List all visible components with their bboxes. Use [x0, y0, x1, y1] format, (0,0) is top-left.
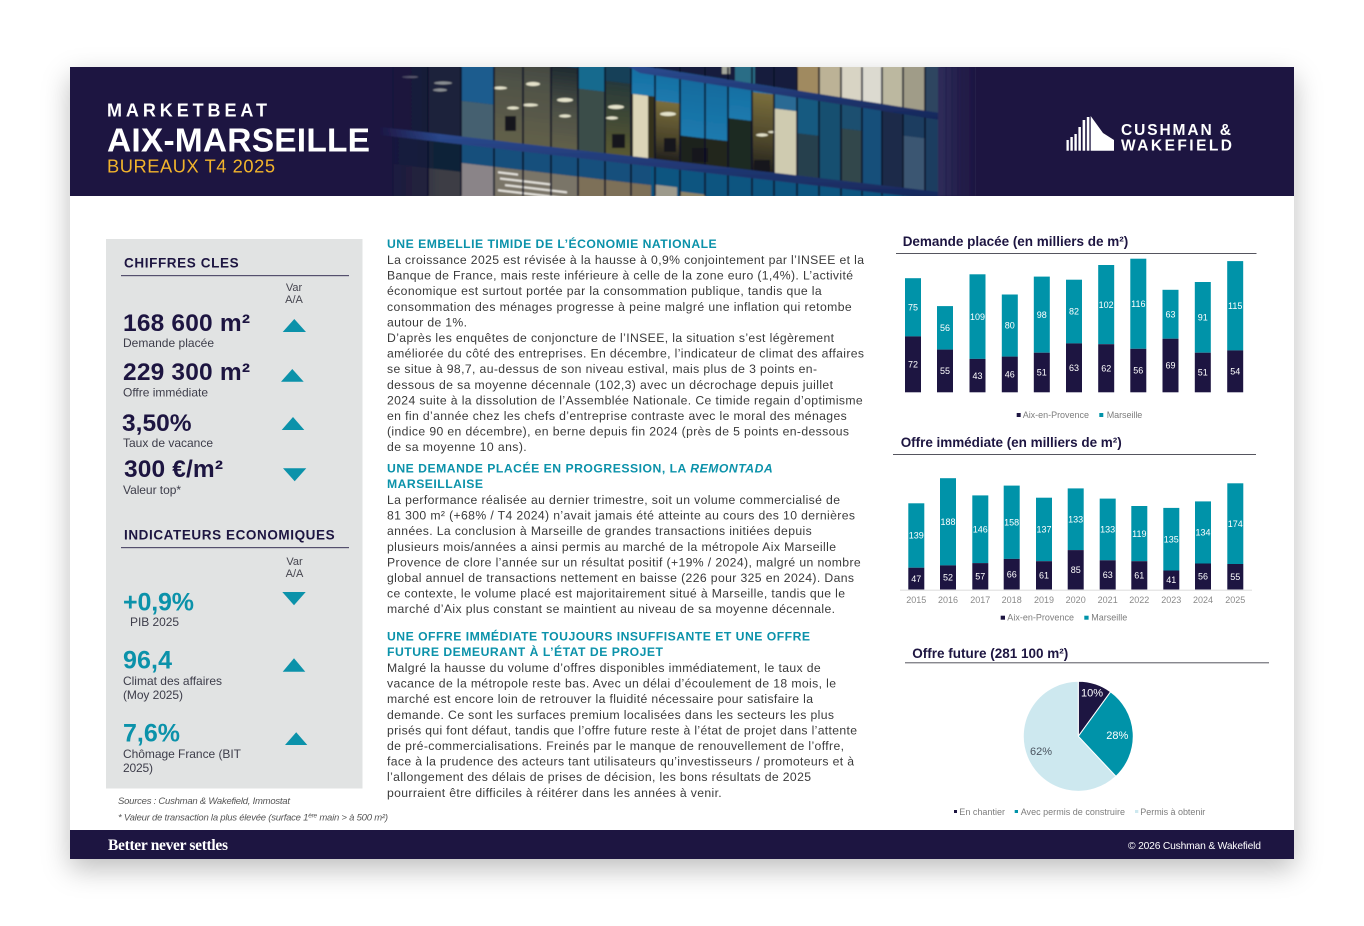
year axis: 2023	[1161, 595, 1181, 605]
text block: offre immediate: marché est encore loin de retrouver la fluidité nécessaire pour satisfaire la	[387, 692, 813, 706]
data labels: 119	[1132, 529, 1146, 539]
chart title: Offre future (281 100 m²)	[912, 646, 1068, 661]
data labels: 56	[940, 323, 950, 333]
stacked bars: Marseille	[908, 478, 1243, 570]
chart title: Demande placée (en milliers de m²)	[903, 234, 1128, 249]
text block: economie nationale: consommation des ménages progresse à peine malgré une inflation qui retombe	[387, 300, 852, 314]
office chairs	[505, 116, 770, 172]
tagline: Better never settles	[108, 837, 228, 854]
indicator: PIB: PIB 2025	[130, 615, 179, 629]
title block	[107, 101, 370, 177]
year axis: 2017	[970, 595, 990, 605]
text block: economie nationale: dessous de sa moyenne décennale (102,3) avec un décrochage depuis juillet	[387, 378, 834, 392]
kpi: taux de vacance	[122, 410, 304, 450]
year axis: 2018	[1002, 595, 1022, 605]
text block: demande placee	[387, 460, 861, 616]
data labels: 47	[911, 574, 921, 584]
column label: variation	[286, 556, 304, 580]
legend: Marseille	[1091, 613, 1127, 623]
data labels: 135	[1164, 534, 1179, 544]
text block: offre immediate: prisés qui font défaut, tandis que l’offre future reste à l’état de projet dans l’attente	[387, 723, 857, 737]
year axis: 2019	[1034, 595, 1054, 605]
text block: economie nationale	[387, 236, 864, 454]
legend: Marseille	[1107, 410, 1142, 420]
data labels: 72	[908, 360, 918, 370]
pie labels: 28%	[1106, 730, 1129, 742]
stacked bars: Marseille	[905, 259, 1243, 359]
indicator: PIB: +0,9%	[123, 589, 194, 617]
data labels: 43	[972, 371, 983, 381]
legend: En chantier	[959, 807, 1005, 817]
pie slices	[1023, 681, 1133, 791]
year axis	[906, 595, 1245, 605]
data labels: 134	[1195, 528, 1211, 538]
text block: offre immediate: pourraient être difficiles à réitérer dans les années à venir.	[387, 786, 722, 800]
data labels: 115	[1228, 301, 1242, 311]
text block: offre immediate: UNE OFFRE IMMÉDIATE TOUJOURS INSUFFISANTE ET UNE OFFRE	[387, 628, 810, 643]
data labels: 63	[1165, 309, 1176, 319]
column label: variation: Var	[286, 282, 302, 294]
text block: economie nationale: (indice 90 en décembre), en berne depuis fin 2024 (près de 5 points en-dessous	[387, 425, 849, 439]
indicator: chomage	[123, 720, 307, 775]
data labels: 55	[1230, 572, 1240, 582]
data labels: 41	[1166, 575, 1176, 585]
text block: economie nationale: UNE EMBELLIE TIMIDE DE L’ÉCONOMIE NATIONALE	[387, 236, 717, 251]
chart: demande placee	[896, 234, 1256, 420]
panel: key figures and indicators	[106, 239, 362, 788]
stacked bars: Aix-en-Provence	[905, 336, 1243, 392]
top floor	[644, 67, 940, 113]
kpi: valeur top	[123, 456, 306, 497]
indicator: climat des affaires: Climat des affaires	[123, 674, 222, 688]
text block: economie nationale: Banque de France, mais reste inférieure à celle de la zone euro (1,4%). L’activité	[387, 269, 853, 283]
title block: BUREAUX T4 2025	[107, 156, 275, 177]
chart: offre future pie	[905, 646, 1269, 817]
kpi: valeur top: 300 €/m²	[124, 456, 223, 483]
legend: Permis à obtenir	[1140, 807, 1205, 817]
text block: economie nationale: économique est surtout portée par la consommation publique, tandis que la	[387, 284, 822, 298]
text block: economie nationale: en fin d’année chez les chefs d’entreprise contraste avec le moral des ménages	[387, 409, 847, 423]
text block: offre immediate: l’allongement des délais de prises de décision, les bons résultats de 2025	[387, 770, 811, 784]
column label: variation	[285, 282, 304, 306]
text block: offre immediate: FUTURE DEMEURANT À L’ÉTAT DE PROJET	[387, 644, 664, 659]
chart title: Offre immédiate (en milliers de m²)	[901, 435, 1122, 450]
data labels: 54	[1230, 366, 1240, 376]
data labels: 75	[908, 302, 918, 312]
data labels: 63	[1069, 363, 1079, 373]
photo: office building facade at dusk	[386, 67, 976, 196]
year axis: 2025	[1225, 595, 1245, 605]
year axis: 2021	[1098, 595, 1118, 605]
text block: demande placee: années. La conclusion à Marseille de grandes transactions initiées depuis	[387, 524, 812, 538]
data labels: 109	[970, 312, 985, 322]
data labels: 66	[1007, 569, 1017, 579]
indicator: chomage: Chômage France (BIT	[123, 747, 242, 761]
heading: indicateurs economiques: INDICATEURS ECONOMIQUES	[124, 528, 335, 543]
data labels: 51	[1037, 368, 1047, 378]
footer bar	[70, 830, 1294, 859]
legend: Aix-en-Provence	[1007, 613, 1074, 623]
indicator: chomage: 7,6%	[123, 720, 180, 748]
text block: demande placee: marché d’Aix plus constant se maintient au niveau de sa moyenne décennale.	[387, 602, 835, 616]
column label: variation: A/A	[285, 294, 304, 306]
data labels: 174	[1228, 519, 1243, 529]
text block: offre immediate: de pré-commercialisations. Freinés par le manque de renouvellement de l’offre,	[387, 739, 844, 753]
text block: demande placee: Provence de clore l’année sur un résultat positif (+19% / 2024), malgré un nombre	[387, 555, 861, 569]
kpi: offre immediate	[123, 359, 304, 400]
text block: demande placee: MARSEILLAISE	[387, 477, 483, 491]
text block: demande placee: 81 300 m² (+68% / T4 2024) n’avait jamais été atteinte au cours des 10 dernières	[387, 509, 855, 523]
column label: variation: Var	[286, 556, 303, 568]
text block: demande placee: global annuel de transactions nettement en baisse (226 pour 325 en 2024). Dans	[387, 571, 854, 585]
year axis: 2024	[1193, 595, 1213, 605]
source notes: main > à 500 m²)	[317, 812, 388, 824]
source notes: * Valeur de transaction la plus élevée (surface 1	[118, 812, 308, 824]
title block: MARKETBEAT	[107, 101, 267, 121]
floor slabs	[380, 127, 940, 200]
data labels: 61	[1039, 571, 1049, 581]
data labels: 55	[940, 366, 950, 376]
kpi: demande placee: 168 600 m²	[123, 310, 250, 337]
text block: offre immediate: face à la prudence des acteurs tant utilisateurs qu’investisseurs / promoteurs et à	[387, 755, 854, 769]
text block: offre immediate: demande. Ce sont les surfaces premium localisées dans les secteurs les plus	[387, 708, 834, 722]
pie labels	[1030, 688, 1129, 758]
logo: Cushman & Wakefield	[1066, 116, 1232, 154]
text block: demande placee: UNE DEMANDE PLACÉE EN PROGRESSION, LA REMONTADA	[387, 460, 773, 476]
legend: Aix-en-Provence	[1023, 410, 1089, 420]
copyright: © 2026 Cushman & Wakefield	[1128, 841, 1261, 852]
data labels: 80	[1005, 321, 1015, 331]
data labels: 63	[1103, 570, 1113, 580]
indicator: chomage: 2025)	[123, 761, 153, 775]
data labels: 52	[943, 573, 953, 583]
pie labels: 62%	[1030, 746, 1052, 758]
facade mullions	[393, 67, 925, 196]
data labels	[909, 514, 1243, 585]
data labels: 102	[1099, 300, 1114, 310]
data labels: 98	[1037, 310, 1047, 320]
kpi: offre immediate: Offre immédiate	[123, 386, 208, 400]
header banner	[70, 67, 1294, 196]
data labels: 188	[940, 517, 956, 527]
data labels: 158	[1004, 518, 1019, 528]
source notes: Sources : Cushman & Wakefield, Immostat	[118, 796, 290, 807]
stacked bars: Aix-en-Provence	[908, 550, 1243, 590]
kpi: demande placee	[123, 310, 306, 350]
text block: demande placee: ce contexte, le volume placé est majoritairement situé à Marseille, tandis que le	[387, 587, 845, 601]
year axis: 2015	[906, 595, 926, 605]
data labels: 56	[1133, 366, 1143, 376]
chart: offre immediate	[893, 435, 1256, 623]
legend: Avec permis de construire	[1021, 807, 1125, 817]
logo: Cushman & Wakefield: CUSHMAN &	[1121, 122, 1231, 139]
legend	[1001, 613, 1127, 623]
source notes	[118, 796, 388, 824]
data labels: 69	[1165, 361, 1176, 371]
indicator: climat des affaires: (Moy 2025)	[123, 688, 183, 702]
text block: economie nationale: améliorée du côté des entreprises. En décembre, l’indicateur de climat des affaires	[387, 347, 864, 361]
data labels: 137	[1036, 525, 1052, 535]
heading: chiffres cles: CHIFFRES CLES	[124, 256, 239, 271]
text block: economie nationale: La croissance 2025 est révisée à la hausse à 0,9% conjointement par l’INSEE et la	[387, 253, 864, 267]
data labels: 46	[1005, 370, 1015, 380]
kpi: taux de vacance: Taux de vacance	[123, 436, 213, 450]
data labels: 85	[1071, 565, 1081, 575]
data labels: 91	[1198, 313, 1208, 323]
text block: economie nationale: D’après les enquêtes de conjoncture de l’INSEE, la situation s’est légèrement	[387, 331, 835, 345]
year axis: 2020	[1066, 595, 1086, 605]
text block: economie nationale: se situe à 98,7, au-dessus de son niveau estival, mais plus de 3 points en-	[387, 362, 817, 376]
kpi: taux de vacance: 3,50%	[122, 410, 192, 437]
text block: offre immediate: vacance de la métropole reste bas. Avec un délai d’écoulement de 18 mois, le	[387, 677, 836, 691]
source notes: ère	[308, 812, 318, 820]
indicator: PIB	[123, 589, 306, 629]
legend	[954, 807, 1205, 817]
pie labels: 10%	[1081, 688, 1103, 700]
legend	[1017, 410, 1142, 420]
data labels: 51	[1198, 368, 1208, 378]
text block: demande placee: La performance réalisée au dernier trimestre, soit un volume commercialisé de	[387, 493, 840, 507]
title block: AIX-MARSEILLE	[107, 122, 370, 159]
indicator: climat des affaires: 96,4	[123, 646, 172, 674]
text block: economie nationale: 2024 suite à la dissolution de l’Assemblée Nationale. Ce timide regain d’optimisme	[387, 393, 863, 407]
indicator: climat des affaires	[123, 646, 305, 702]
kpi: demande placee: Demande placée	[123, 336, 214, 350]
data labels: 61	[1134, 571, 1144, 581]
text block: economie nationale: autour de 1%.	[387, 315, 467, 329]
text block: demande placee: plusieurs mois/années a ainsi permis au marché de la métropole Aix Marseille	[387, 540, 836, 554]
text block: offre immediate: Malgré la hausse du volume d’offres disponibles immédiatement, le taux de	[387, 661, 821, 675]
data labels: 133	[1068, 514, 1083, 524]
kpi: valeur top: Valeur top*	[123, 483, 181, 497]
data labels: 56	[1198, 572, 1208, 582]
year axis: 2022	[1129, 595, 1149, 605]
data labels	[908, 299, 1242, 381]
text block: economie nationale: de sa moyenne 10 ans).	[387, 440, 527, 454]
logo: Cushman & Wakefield: WAKEFIELD	[1121, 137, 1232, 154]
year axis: 2016	[938, 595, 958, 605]
data labels: 82	[1069, 307, 1079, 317]
column label: variation: A/A	[286, 568, 304, 580]
ceiling lights	[493, 82, 776, 136]
data labels: 57	[975, 572, 985, 582]
data labels: 116	[1131, 299, 1145, 309]
data labels: 62	[1101, 364, 1111, 374]
data labels: 146	[973, 524, 988, 534]
text block: offre immediate	[387, 628, 857, 800]
data labels: 139	[909, 531, 924, 541]
kpi: offre immediate: 229 300 m²	[123, 359, 250, 386]
data labels: 133	[1100, 525, 1115, 535]
